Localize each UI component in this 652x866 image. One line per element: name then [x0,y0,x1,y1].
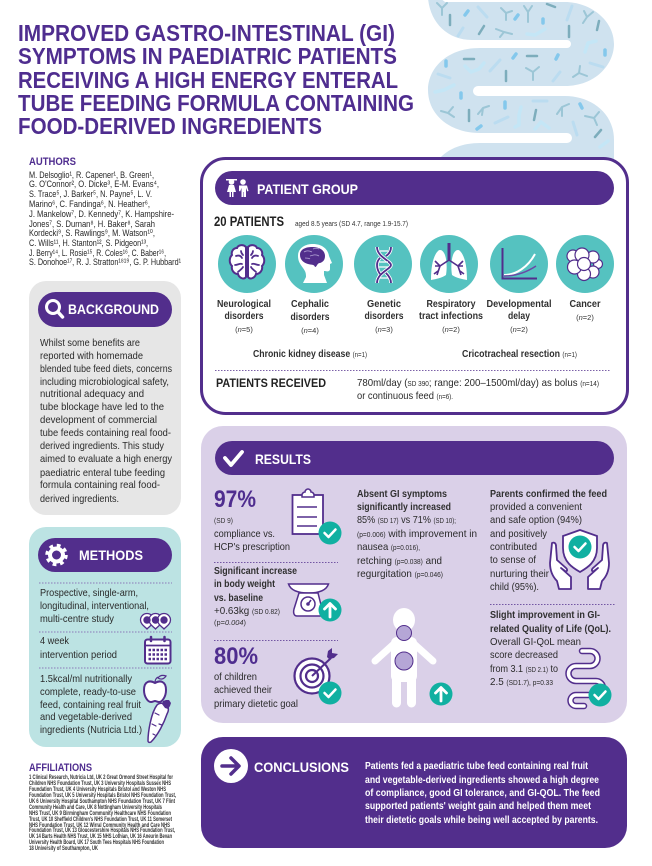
patients received [216,376,599,402]
affiliations: Foundation Trust, UK 4 University Hospitals Bristol and Weston NHS [29,787,166,793]
authors: C. Wills¹¹, H. Stanton¹², S. Pidgeon¹³, [29,238,148,249]
methods text: feed: ingredients (Nutricia Ltd.) [40,724,142,736]
panel: results [201,426,627,723]
affiliations: NHS Trust, UK 9 Birmingham Community Healthcare NHS Foundation [29,811,171,817]
label: neurological: (n=5) [235,325,253,334]
label: cancer: Cancer [570,299,601,310]
label: cephalic: disorders [290,312,330,323]
affiliations: Community Health and Care, UK 8 Nottingham University Hospitals [29,805,162,811]
label: respiratory [419,299,483,334]
background text: nutritional adequacy and [40,388,144,400]
title [18,20,414,139]
background text: Whilst some benefits are [40,337,140,349]
label: neurological: Neurological [217,299,271,310]
stat: compliance 97%: 97% [214,486,256,513]
icon: calendar [145,637,170,664]
affiliations: Foundation Trust, UK 13 Gloucestershire Hospitals NHS Foundation Trust, [29,828,175,834]
methods text: feed [40,673,142,736]
label: cephalic: (n=4) [301,326,319,335]
patients received: or continuous feed (n=6). [357,390,453,402]
authors: AUTHORS [29,156,76,168]
stat: quality of life: from 3.1 (SD 2.1) to [490,663,558,675]
title: FOOD-DERIVED INGREDIENTS [18,113,322,139]
stat: body weight: Significant increase [214,566,297,577]
icon: scale with up arrow [288,584,342,622]
stat: absent GI symptoms: nausea (p=0.016), [357,541,420,553]
background text [40,337,173,505]
stat: absent GI symptoms: 85% (SD 17) vs 71% (SD 10); [357,514,456,526]
stat: quality of life: related Quality of Life (QoL). [490,624,611,635]
label: cancer [570,299,601,322]
results heading: RESULTS [255,451,311,467]
authors: J. Berry¹⁴, L. Rosie¹⁵, R. Coles¹⁶, C. Baber¹⁶, [29,248,166,259]
stat: absent GI symptoms [357,489,477,580]
affiliations: Children NHS Foundation Trust, UK 3 University Hospitals Sussex NHS [29,781,171,787]
conclusions heading: CONCLUSIONS [254,759,349,775]
background text: tube blockage have led to the [40,401,164,413]
stat: parents confirmed: and safe option (94%) [490,514,582,526]
methods text: feed: feed, containing real fruit [40,699,141,711]
stat: compliance 97%: HCP's prescription [214,541,290,553]
conclusions text [365,761,600,826]
conclusions text: their dietetic goals while being well accepted by parents. [365,815,598,826]
background heading: BACKGROUND [68,301,159,317]
stat: body weight: vs. baseline [214,593,263,604]
patient group heading [215,171,614,205]
affiliations [29,762,176,852]
methods text: feed: 1.5kcal/ml nutritionally [40,673,133,685]
methods heading [38,538,172,572]
stat: body weight: +0.63kg (SD 0.82) [214,605,280,617]
stat: quality of life: 2.5 (SD1.7), p=0.33 [490,676,553,688]
stat: body weight [214,566,297,627]
panel: methods [29,527,181,747]
methods text: study design [40,587,149,625]
title: TUBE FEEDING FORMULA CONTAINING [18,90,414,116]
methods heading: METHODS [79,547,143,563]
decorative intestine illustration [428,0,614,190]
label: genetic: Genetic [367,299,401,310]
patients received: 780ml/day (SD 390; range: 200–1500ml/day) as bolus (n=14) [357,377,599,389]
stat: absent GI symptoms: retching (p=0.038) and [357,555,442,567]
stat: compliance 97% [214,486,290,553]
label: cricotracheal resection: Cricotracheal resection (n=1) [462,349,577,360]
results heading [215,441,614,475]
authors: J. Mankelow⁷, D. Kennedy⁷, K. Hampshire- [29,209,174,220]
icon: growth chart [490,235,548,293]
icon: arrow [214,749,248,783]
authors: S. Trace⁵, J. Barker⁵, N. Payne⁵, L. V. [29,189,152,200]
authors: Kordecki⁹, S. Rawlings⁹, M. Watson¹⁰, [29,228,155,239]
affiliations: NHS Foundation Trust, UK 12 Wirral Community Health and Care NHS [29,823,170,829]
authors: Marino⁶, C. Fandinga⁶, N. Heather⁶, [29,199,150,210]
label: cephalic: Cephalic [291,299,329,310]
icon: child body with up arrow [375,608,452,706]
label: respiratory: tract infections [419,311,483,322]
stat: parents confirmed: to sense of [490,554,536,566]
patient count: aged 8.5 years (SD 4.7, range 1.9-15.7) [295,219,408,228]
stat: parents confirmed: nurturing their [490,568,549,580]
icon: carrot [148,700,171,742]
methods text: duration: 4 week [40,635,70,647]
stat: compliance 97%: (SD 9) [214,516,233,525]
methods text: feed: and vegetable-derived [40,711,132,723]
stat: parents confirmed: and positively [490,528,548,540]
panel: background [29,281,181,515]
patient group heading: PATIENT GROUP [257,181,358,197]
stat: absent GI symptoms: regurgitation (p=0.046) [357,568,443,580]
icon: hands with shield [550,530,609,589]
background text: including microbiological safety, [40,376,169,388]
background text: paediatric enteral tube feeding [40,467,165,479]
icon: intestine with check [568,651,612,706]
icon: cephalic head [285,235,343,293]
background text: blended tube feed diets, concerns [40,363,172,375]
stat: parents confirmed: provided a convenient [490,501,582,513]
stat: dietetic goal 80%: primary dietetic goal [214,698,298,710]
label: developmental [486,299,552,334]
affiliations: UK 14 Barts Health NHS Trust, UK 15 NHS Lothian, UK 16 Aneurin Bevan [29,834,172,840]
stat: quality of life: score decreased [490,649,558,661]
label: respiratory: (n=2) [442,325,460,334]
background text: formula containing real food- [40,479,160,491]
methods text: duration [40,635,117,661]
background text: reported with homemade [40,350,143,362]
conclusions text: of compliance, good GI tolerance, and GI-QOL. The feed [365,788,600,799]
background heading [38,292,172,327]
panel: conclusions [201,737,627,848]
stat: dietetic goal 80% [214,643,298,710]
stat: absent GI symptoms: Absent GI symptoms [357,489,447,500]
stat: quality of life: Overall GI-QoL mean [490,636,581,648]
stat: compliance 97%: compliance vs. [214,528,275,540]
affiliations: University Health Board, UK 17 South Tees Hospitals NHS Foundation [29,840,164,846]
patient count: 20 PATIENTS [214,213,284,229]
stat: dietetic goal 80%: achieved their [214,684,272,696]
affiliations: Trust, UK 10 Sheffield Children's NHS Foundation Trust, UK 11 Somerset [29,817,172,823]
stat: parents confirmed [490,489,607,593]
affiliations: UK 6 University Hospital Southampton NHS Foundation Trust, UK 7 Flint [29,799,175,805]
methods text: study design: Prospective, single-arm, [40,587,138,599]
stat: parents confirmed: child (95%). [490,581,539,593]
affiliations: 1 Clinical Research, Nutricia Ltd, UK 2 Great Ormond Street Hospital for [29,775,173,781]
label: chronic kidney disease: Chronic kidney disease (n=1) [253,349,367,360]
affiliations: 18 University of Southampton, UK [29,846,98,852]
icon: genetic DNA [354,235,412,293]
stat: body weight: (p=0.004) [214,618,246,627]
authors: S. Donohoe¹⁷, R. J. Stratton¹⁸¹⁹, G. P. Hubbard¹ [29,257,181,268]
stat: quality of life [490,610,611,688]
stat: absent GI symptoms: (p=0.006) with improvement in [357,528,477,540]
label: developmental: Developmental [486,299,552,310]
icon: neurological brain [218,235,276,293]
affiliations: AFFILIATIONS [29,762,92,774]
label: developmental: delay [508,311,530,322]
label: neurological [217,299,271,334]
conclusions text: Patients fed a paediatric tube feed containing real fruit [365,761,589,772]
background text: derived ingredients. This study [40,440,165,452]
label: cephalic [290,299,330,335]
icon: location pins [140,614,170,629]
stat: dietetic goal 80%: 80% [214,643,258,670]
background text: tube feeds containing real food- [40,427,171,439]
authors: G. O'Connor², O. Dicke³, E-M. Evans⁴, [29,179,159,190]
stat: body weight: in body weight [214,579,276,590]
icon: clipboard with check [292,489,342,544]
methods text: feed: complete, ready-to-use [40,686,136,698]
icon: cancer cells [556,235,614,293]
stat: dietetic goal 80%: of children [214,671,257,683]
title: SYMPTOMS IN PAEDIATRIC PATIENTS [18,43,397,69]
authors: M. Delsoglio¹, R. Capener¹, B. Green¹, [29,170,154,181]
title: IMPROVED GASTRO-INTESTINAL (GI) [18,20,395,46]
conclusions text: and vegetable-derived ingredients showed a high degree [365,775,599,786]
title: RECEIVING A HIGH ENERGY ENTERAL [18,67,398,93]
stat: absent GI symptoms: significantly increased [357,502,451,513]
icon: lungs [420,235,478,293]
stat: parents confirmed: Parents confirmed the feed [490,489,607,500]
stat: quality of life: Slight improvement in GI- [490,610,600,621]
conclusions text: supported patients' weight gain and helped them meet [365,801,592,812]
label: respiratory: Respiratory [426,299,476,310]
methods text: study design: longitudinal, interventional, [40,600,149,612]
authors [29,156,181,268]
icon: target with check [294,648,342,704]
stat: parents confirmed: contributed [490,541,537,553]
methods text: duration: intervention period [40,649,117,661]
icon: apple [144,675,166,702]
background text: development of commercial [40,414,157,426]
authors: Jones⁷, S. Durnan⁸, H. Baker⁸, Sarah [29,219,155,230]
label: cancer: (n=2) [576,313,594,322]
methods text: study design: multi-centre study [40,613,115,625]
label: genetic: (n=3) [375,325,393,334]
panel: patient group [202,158,628,414]
label: genetic: disorders [364,311,404,322]
background text: aimed to evaluate a high energy [40,453,173,465]
patient count [214,213,408,229]
label: neurological: disorders [224,311,264,322]
patients received: PATIENTS RECEIVED [216,376,326,390]
background text: derived ingredients. [40,493,119,505]
affiliations: Foundation Trust, UK 5 University Hospitals Bristol NHS Foundation Trust, [29,793,176,799]
label: developmental: (n=2) [510,325,528,334]
label: genetic [364,299,404,334]
